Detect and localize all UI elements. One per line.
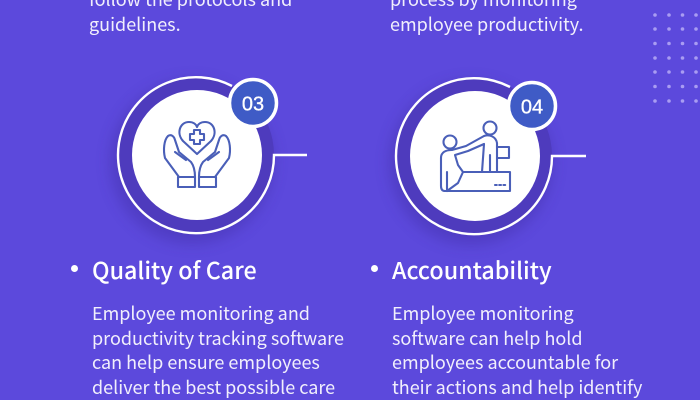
body text: Employee monitoring and (92, 300, 310, 326)
body text: deliver the best possible care (92, 374, 335, 400)
icon: person helping climber (441, 122, 510, 191)
body text: software can help hold (392, 324, 583, 350)
body text (92, 300, 344, 400)
medallion 03 (110, 77, 307, 244)
panel: accountability (371, 252, 642, 400)
bullet (71, 265, 78, 272)
badge 04 (508, 82, 556, 130)
badge 03 (230, 80, 276, 126)
body text: their actions and help identify (392, 374, 642, 400)
text: top left fragment (89, 0, 292, 36)
heading: Accountability (392, 252, 552, 286)
icon: hands holding heart (164, 122, 230, 187)
body text: Employee monitoring (392, 300, 574, 326)
panel: quality of care (71, 252, 344, 400)
body text: productivity tracking software (92, 324, 344, 350)
medallion 04 (389, 78, 586, 245)
body text: can help ensure employees (92, 349, 320, 375)
bullet (371, 265, 378, 272)
badge 04: 04 (521, 96, 543, 118)
badge 03: 03 (242, 94, 264, 116)
text: top left fragment: guidelines. (89, 10, 181, 36)
body text: employees accountable for (392, 349, 618, 375)
decorative dot grid (653, 13, 698, 103)
body text (392, 300, 642, 400)
heading: Quality of Care (92, 252, 257, 286)
text: top right fragment: employee productivity. (390, 10, 584, 36)
